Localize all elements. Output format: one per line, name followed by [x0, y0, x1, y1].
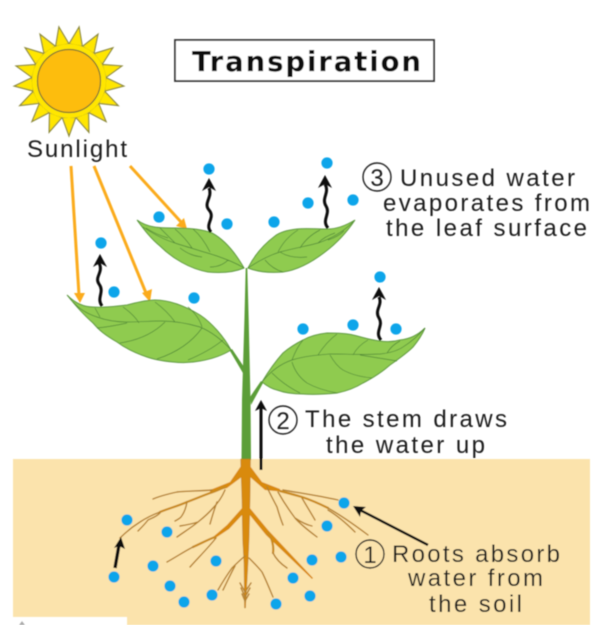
roots	[120, 459, 368, 608]
root arrow left	[114, 537, 125, 568]
leaf: top left	[137, 220, 244, 273]
left petiole	[230, 349, 244, 374]
callout 2: The stem draws	[305, 406, 507, 433]
callout 1: 1	[363, 542, 377, 569]
callout 1: the soil	[429, 591, 522, 618]
callout 1: water from	[407, 565, 543, 592]
icon: sun	[14, 26, 124, 136]
callout 3: the leaf surface	[386, 215, 587, 242]
white corner patch	[0, 617, 127, 625]
thin root branches	[120, 487, 368, 601]
stem	[242, 268, 251, 460]
leaf: right	[262, 328, 425, 394]
title box	[175, 40, 434, 81]
water drops in soil	[108, 497, 350, 610]
plant	[67, 220, 425, 608]
callout 2: the water up	[326, 432, 485, 459]
stem arrow	[255, 400, 267, 470]
soil background	[13, 459, 590, 625]
taproot	[241, 459, 250, 608]
orange sunlight arrows	[71, 166, 187, 303]
leaf: left	[67, 295, 231, 363]
lower right thick branch	[249, 507, 313, 579]
root crown left	[210, 466, 243, 492]
callout 1: Roots absorb	[392, 541, 560, 568]
callout 2	[269, 406, 507, 459]
right petiole	[250, 381, 263, 405]
wavy evaporation arrows	[93, 175, 386, 340]
callout 3: evaporates from	[383, 190, 590, 217]
callout 3	[363, 163, 590, 242]
water drops above leaves	[95, 157, 402, 335]
title: Transpiration	[192, 46, 421, 78]
medium root branches	[160, 487, 328, 553]
root arrow right	[353, 506, 428, 545]
leaf: top right	[248, 220, 355, 272]
callout 2: 2	[276, 408, 290, 435]
callout 3: 3	[370, 165, 384, 192]
root crown right	[249, 466, 280, 492]
callout 1	[356, 540, 560, 618]
callout 3: Unused water	[400, 165, 575, 192]
lower left thick branch	[213, 507, 243, 539]
sunlight label: Sunlight	[27, 136, 127, 163]
